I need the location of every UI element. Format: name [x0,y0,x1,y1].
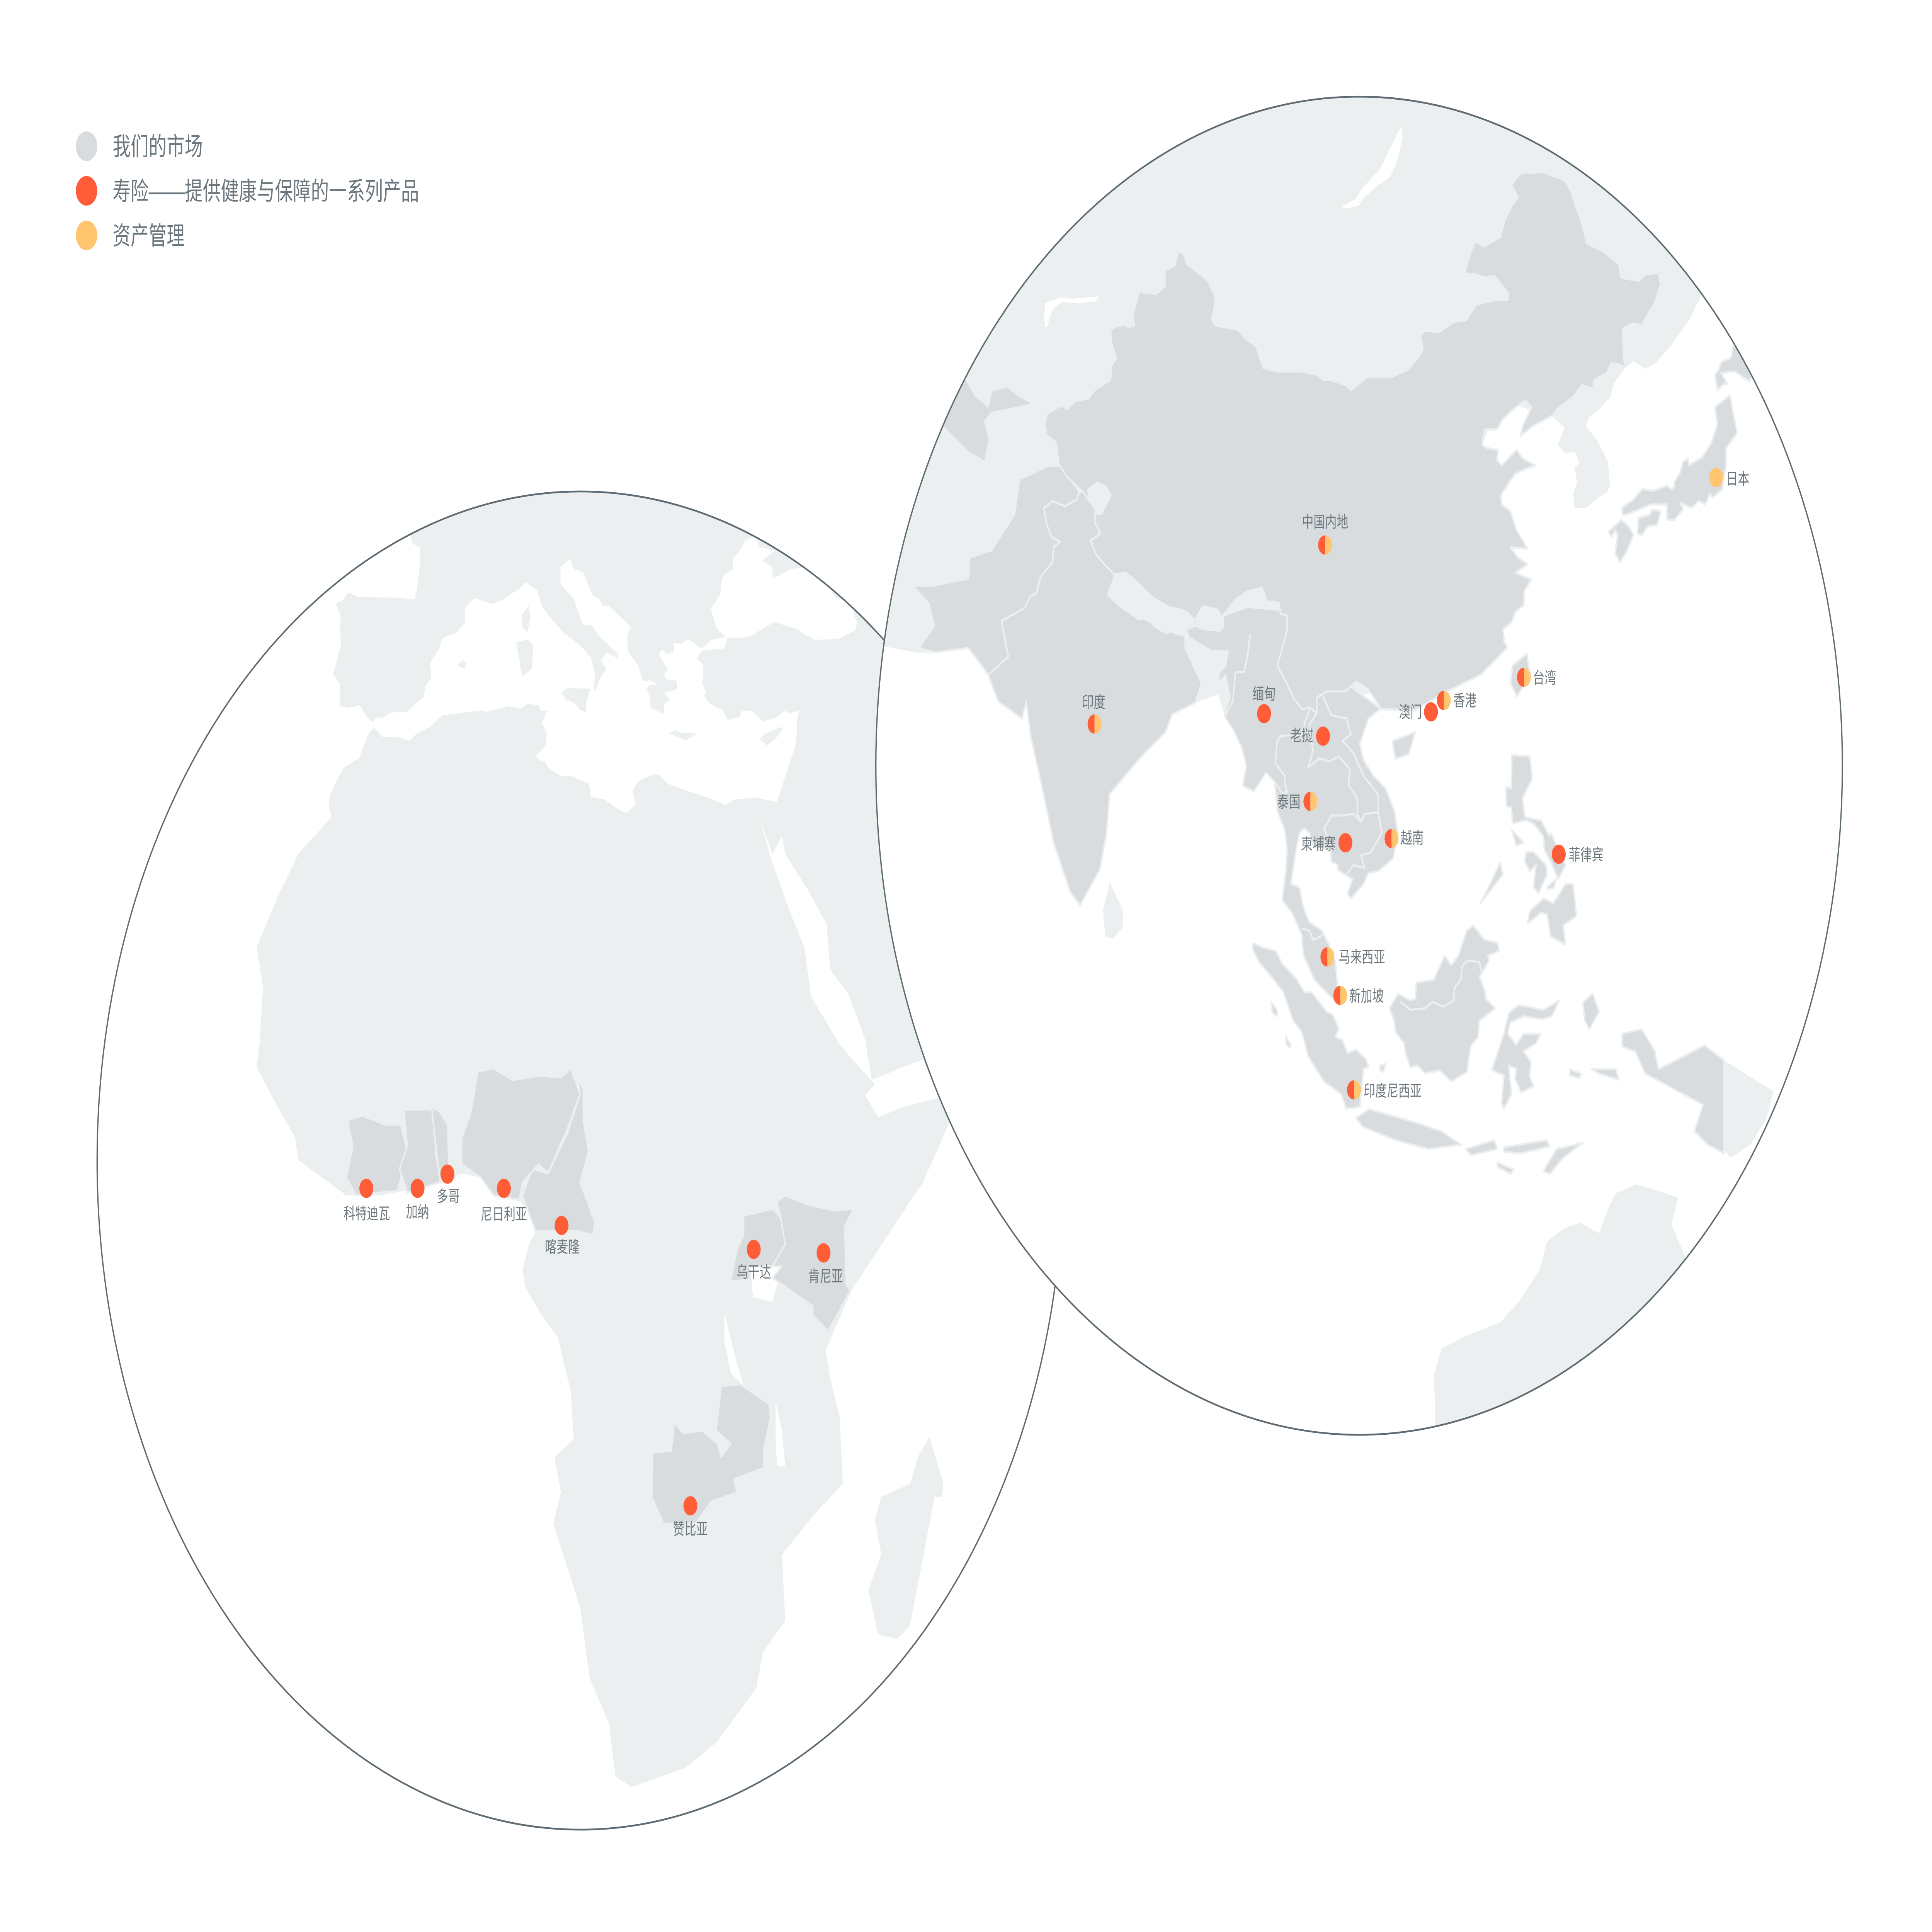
marker: Cameroon: 喀麦隆 [545,1238,580,1256]
marker: Thailand: 泰国 [1277,793,1300,811]
Lake Baikal [1341,126,1403,209]
marker: Nigeria [481,1179,527,1223]
map panel: Asia globe [735,5,1842,1462]
Nepal [1108,573,1187,634]
Red Sea and Gulf of Aden [760,818,939,1117]
mainland Southeast Asia [1186,607,1398,1005]
marker: Vietnam: 越南 [1401,829,1424,847]
marker: Uganda [736,1240,771,1281]
lakes [724,1266,785,1466]
China [988,172,1661,714]
marker: Mainland China [1302,513,1348,554]
marker: India [1082,693,1105,734]
Mediterranean islands [457,605,783,745]
marker: India: 印度 [1082,693,1105,711]
marker: Togo: 多哥 [437,1187,460,1206]
country borders [1226,636,1482,1010]
marker: Kenya: 肯尼亚 [808,1267,843,1286]
Lake Balkhash [1044,296,1099,327]
map panel: Africa globe [97,428,1064,1830]
marker: Taiwan [1517,668,1556,687]
Sub-Saharan Africa [257,818,1038,1787]
legend item: asset management: 资产管理 [112,222,185,250]
light land: Russia, Central Asia, Korea [735,5,1770,719]
marker: Côte d'Ivoire [344,1179,390,1223]
marker: Myanmar: 缅甸 [1252,685,1276,703]
marker: Macau: 澳门 [1399,703,1422,721]
marker: Kenya [808,1243,843,1286]
marker: Hong Kong: 香港 [1453,692,1476,710]
markers and labels: Africa [344,1165,843,1538]
map: Africa, Europe and Middle East land [257,492,950,1787]
Europe [333,492,753,723]
Borneo [1389,925,1499,1082]
marker: Nigeria: 尼日利亚 [481,1205,527,1223]
Caucasus [829,588,844,600]
outline: Africa globe [97,492,1064,1830]
Aksai Chin [1087,481,1112,515]
marker: Hong Kong [1437,691,1476,710]
islands and borders of Southeast Asia [1226,636,1577,1109]
marker: Côte d'Ivoire: 科特迪瓦 [344,1204,390,1223]
map: Asia land [735,5,1773,1462]
marker: Philippines: 菲律宾 [1569,845,1604,864]
legend item: our markets [76,131,203,161]
marker: Malaysia [1320,947,1385,966]
India and Pakistan border [988,489,1080,675]
highlighted markets: Africa [346,1068,854,1524]
marker: Vietnam [1384,829,1424,848]
North Africa, Turkey and Middle East [329,610,895,956]
marker: Zambia [673,1496,708,1538]
marker: Cambodia [1301,833,1352,853]
marker: Myanmar [1252,685,1276,723]
marker: Cameroon [545,1216,580,1256]
marker: Laos [1290,726,1330,746]
marker: Cambodia: 柬埔寨 [1301,835,1336,853]
marker: Japan: 日本 [1726,470,1749,488]
markers and labels: Asia [1082,468,1749,1100]
marker: Laos: 老挝 [1290,726,1313,745]
marker: Macau [1399,702,1438,721]
Crimea and north Black Sea shore [757,539,803,579]
marker: Ghana [406,1179,429,1221]
marker: Uganda: 乌干达 [736,1263,771,1281]
marker: Mainland China: 中国内地 [1302,513,1348,531]
Sulawesi [1492,1000,1560,1109]
marker: Singapore: 新加坡 [1349,987,1384,1005]
legend item: our markets: 我们的市场 [112,133,203,160]
Philippines [1481,755,1577,944]
marker: Togo [437,1165,460,1206]
legend item: life insurance: 寿险——提供健康与保障的一系列产品 [112,177,419,205]
India and Pakistan [913,466,1202,905]
Sumatra [1253,943,1368,1109]
marker: Ghana: 加纳 [406,1202,429,1221]
marker: Japan [1709,468,1749,488]
marker: Taiwan: 台湾 [1533,669,1556,687]
small Sumatra islands [1271,1002,1386,1072]
marker: Singapore [1333,986,1384,1005]
Hainan, Taiwan, New Guinea and Lesser Sunda islands [1356,654,1773,1174]
Madagascar [869,1437,944,1639]
marker: Zambia: 赞比亚 [673,1520,708,1538]
legend [76,131,419,250]
marker: Malaysia: 马来西亚 [1339,948,1385,966]
Bhutan [1194,605,1224,631]
Japan [1609,344,1752,563]
marker: Thailand [1277,792,1317,811]
legend item: asset management [76,221,185,250]
marker: Indonesia: 印度尼西亚 [1364,1082,1422,1100]
outline: Asia globe [876,97,1842,1435]
Sri Lanka, Australia and Central Asia patch [942,378,1704,1462]
marker: Philippines [1552,845,1604,864]
